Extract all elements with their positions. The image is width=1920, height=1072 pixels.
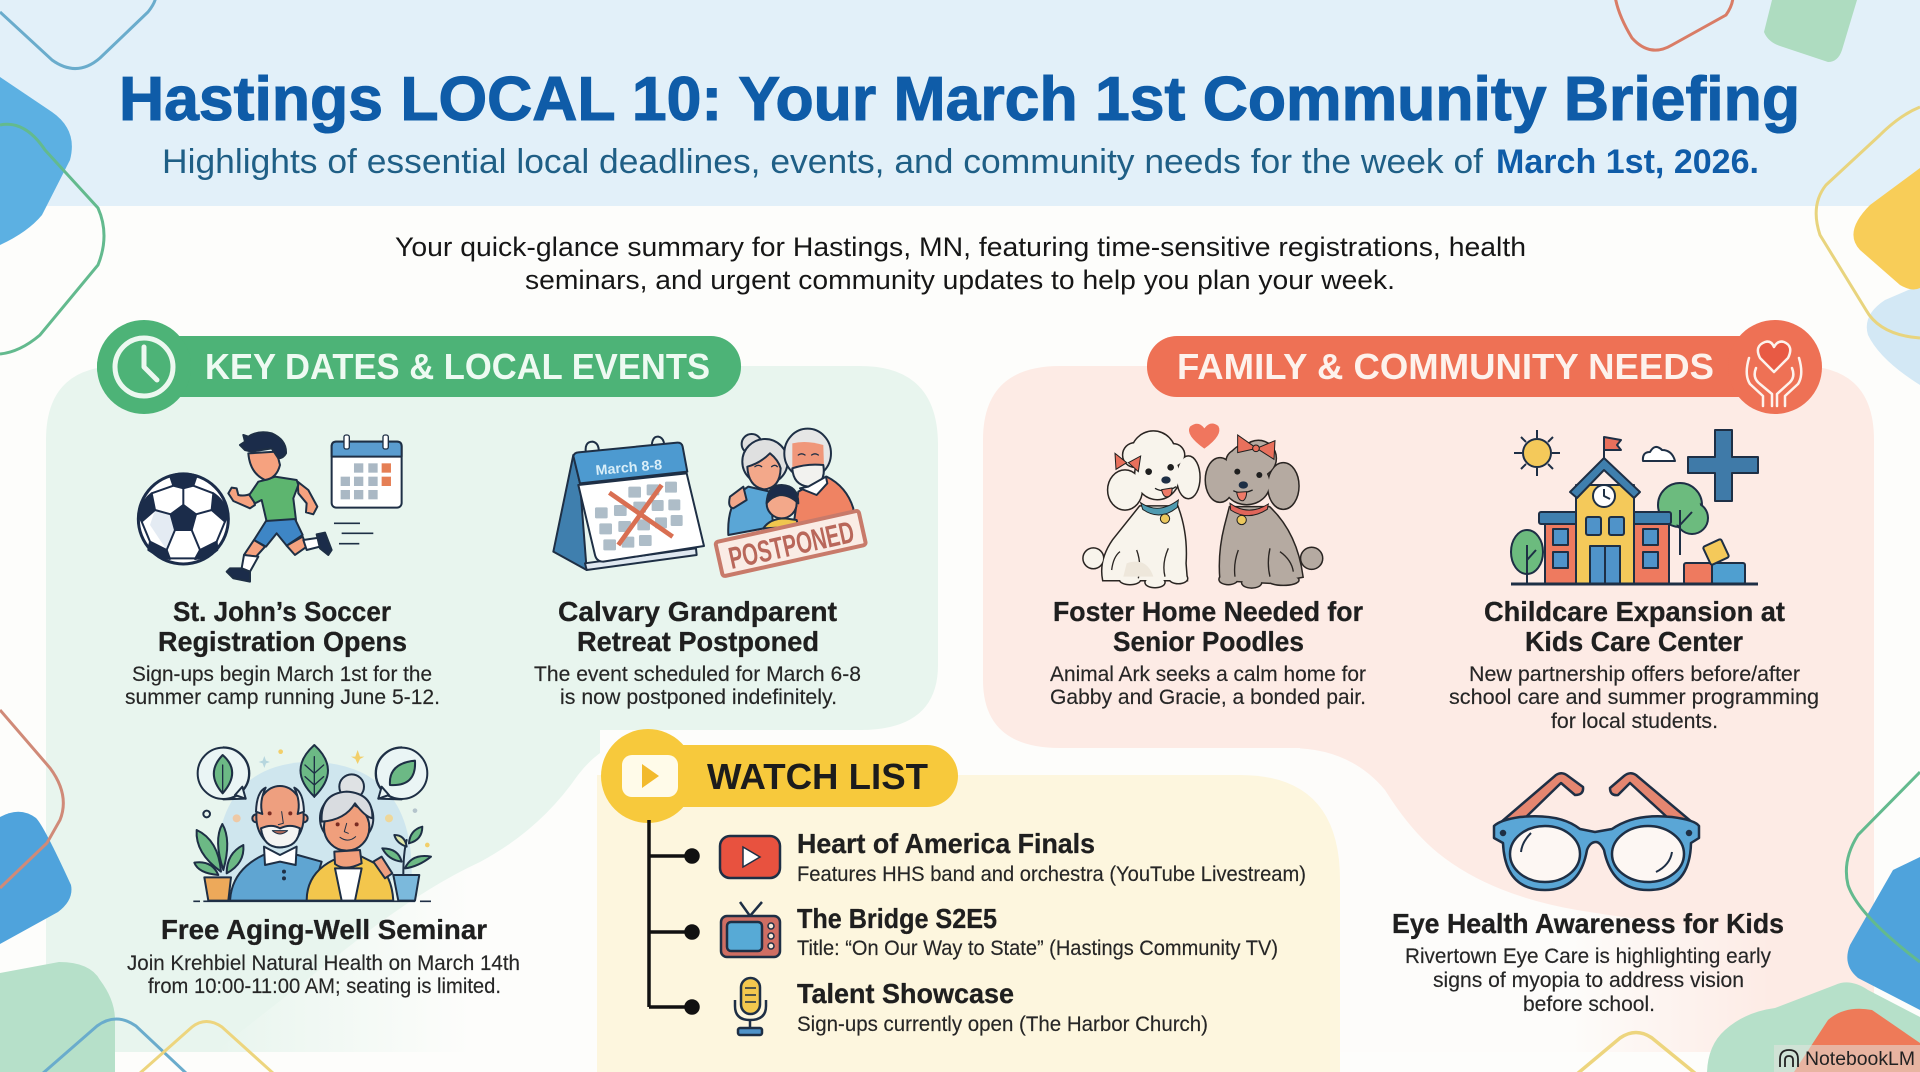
description: The event scheduled for March 6-8 <box>534 663 861 686</box>
icon: television <box>721 902 780 957</box>
description: Animal Ark seeks a calm home for <box>1050 663 1366 686</box>
icon: hands holding heart <box>1747 342 1801 406</box>
decorative blob: right yellow outline <box>1816 107 1920 338</box>
description: Title: “On Our Way to State” (Hastings Community TV) <box>797 937 1278 960</box>
decorative blob: top-right red outline <box>1615 0 1733 50</box>
description <box>1405 945 1771 1016</box>
description: Sign-ups currently open (The Harbor Church) <box>797 1013 1208 1036</box>
heading: Free Aging-Well Seminar <box>161 914 487 945</box>
heading <box>1053 596 1363 657</box>
heading: Heart of America Finals <box>797 828 1095 859</box>
icon: soccer ball <box>138 473 228 564</box>
panel: family needs background <box>983 366 1874 1052</box>
heading <box>1484 596 1785 657</box>
decorative blob: right yellow <box>1853 168 1920 289</box>
panel edge: key dates fade <box>215 730 700 1052</box>
decorative blob: bottom-left teal outline <box>42 1019 187 1072</box>
heading <box>158 596 407 657</box>
description <box>127 952 520 998</box>
decorative blob: right light blue <box>1867 285 1920 385</box>
icon: medical cross <box>1688 430 1758 501</box>
description: is now postponed indefinitely. <box>560 686 837 709</box>
decorative blob: bottom-right red <box>1794 1009 1920 1072</box>
decorative blob: right green outline <box>1846 772 1920 962</box>
item: aging-well seminar <box>127 745 520 998</box>
description: Features HHS band and orchestra (YouTube Livestream) <box>797 863 1306 886</box>
item: foster home for poodles <box>1050 423 1366 709</box>
heading: Calvary Grandparent <box>558 596 837 627</box>
decorative blob: bottom-left green <box>0 962 115 1072</box>
icon: clock <box>115 338 173 396</box>
heading: Senior Poodles <box>1113 626 1304 657</box>
watch item: Heart of America Finals <box>720 828 1306 886</box>
icon: running boy <box>227 432 332 582</box>
heading: St. John’s Soccer <box>173 596 391 627</box>
icon: soccer, boy and calendar <box>138 432 402 582</box>
decorative blob: bottom-right blue <box>1847 857 1920 1010</box>
icon: microphone <box>735 978 766 1035</box>
description <box>1449 663 1819 733</box>
description: before school. <box>1523 993 1655 1016</box>
description: Rivertown Eye Care is highlighting early <box>1405 945 1771 968</box>
heading: key dates and local events: KEY DATES & LOCAL EVENTS <box>205 346 710 387</box>
item: soccer registration <box>125 432 440 709</box>
poodle: grey <box>1206 435 1322 587</box>
subtitle: March 1st, 2026. <box>1496 143 1759 181</box>
subtitle: Highlights of essential local deadlines, events, and community needs for the week of <box>162 143 1484 181</box>
description: Gabby and Gracie, a bonded pair. <box>1050 686 1366 709</box>
watch item: Talent Showcase <box>735 978 1208 1036</box>
heading: Kids Care Center <box>1525 626 1743 657</box>
poodle: white <box>1084 432 1199 587</box>
description: from 10:00-11:00 AM; seating is limited. <box>148 975 501 998</box>
watch item: The Bridge S2E5 <box>721 902 1278 960</box>
panel: watch list background <box>597 775 1340 1072</box>
decorative blob: top-left outline <box>0 0 156 69</box>
description: summer camp running June 5-12. <box>125 686 440 709</box>
watermark: NotebookLM <box>1774 1045 1920 1072</box>
icon: video play <box>720 836 780 878</box>
icon: grandparents and child <box>728 429 853 535</box>
icon: desk calendar <box>553 437 704 570</box>
icon: poodles <box>1084 423 1322 587</box>
intro text <box>395 232 1526 295</box>
heading: The Bridge S2E5 <box>797 903 997 934</box>
icon: school with medical cross <box>1511 430 1758 584</box>
item: childcare expansion <box>1449 430 1819 733</box>
icon: play button <box>622 755 678 797</box>
heading: Talent Showcase <box>797 978 1014 1009</box>
heading: Foster Home Needed for <box>1053 596 1363 627</box>
icon: heart <box>1189 423 1219 449</box>
description <box>534 663 861 709</box>
panel edge: family needs fade <box>1290 748 1770 1052</box>
heading: key dates and local events <box>97 320 741 414</box>
description: Sign-ups begin March 1st for the <box>132 663 432 686</box>
item: grandparent retreat <box>534 429 866 709</box>
icon: speed lines <box>334 523 373 544</box>
icon: postponed stamp: POSTPONED <box>726 515 857 576</box>
header band <box>0 0 1920 206</box>
decorative blob: left green outline <box>0 124 104 354</box>
decorative blob: left red outline <box>0 710 63 888</box>
decorative blob: bottom-right yellow outline <box>1577 1032 1696 1072</box>
heading: watch list <box>601 729 958 823</box>
decorative blob: left blue lower <box>0 812 71 944</box>
decorative blob: top-right green <box>1764 0 1857 62</box>
watermark: NotebookLM: NotebookLM <box>1805 1049 1915 1070</box>
panel: key dates background <box>46 366 938 1052</box>
heading <box>558 596 837 657</box>
description: for local students. <box>1551 710 1718 733</box>
heading: watch list: WATCH LIST <box>707 756 928 797</box>
decorative blob: bottom-left yellow outline <box>139 1022 274 1072</box>
heading: Registration Opens <box>158 626 407 657</box>
watch list timeline <box>649 820 698 1013</box>
decorative blob: bottom-right green <box>1707 982 1920 1072</box>
item: eye health <box>1392 773 1784 1016</box>
description: school care and summer programming <box>1449 686 1819 709</box>
description: Join Krehbiel Natural Health on March 14th <box>127 952 520 975</box>
heading: Childcare Expansion at <box>1484 596 1785 627</box>
heading: family and community needs: FAMILY & COMMUNITY NEEDS <box>1177 346 1714 387</box>
description <box>1050 663 1366 709</box>
intro text: Your quick-glance summary for Hastings, MN, featuring time-sensitive registrations, health <box>395 232 1526 262</box>
title: Hastings LOCAL 10: Your March 1st Community Briefing <box>119 65 1800 134</box>
icon: postponed stamp <box>715 511 866 578</box>
heading: Eye Health Awareness for Kids <box>1392 908 1784 939</box>
decorative blob: left blue <box>0 77 72 245</box>
heading: Retreat Postponed <box>577 626 819 657</box>
icon: glasses <box>1494 773 1699 890</box>
heading: family and community needs <box>1147 320 1822 414</box>
intro text: seminars, and urgent community updates to help you plan your week. <box>525 265 1395 295</box>
description: New partnership offers before/after <box>1469 663 1800 686</box>
icon: calendar <box>332 435 402 508</box>
icon: calendar, family and stamp <box>553 429 866 578</box>
description: signs of myopia to address vision <box>1433 969 1744 992</box>
icon: desk calendar: March 8-8 <box>595 456 663 478</box>
icon: seniors with plants <box>193 745 431 901</box>
description <box>125 663 440 709</box>
